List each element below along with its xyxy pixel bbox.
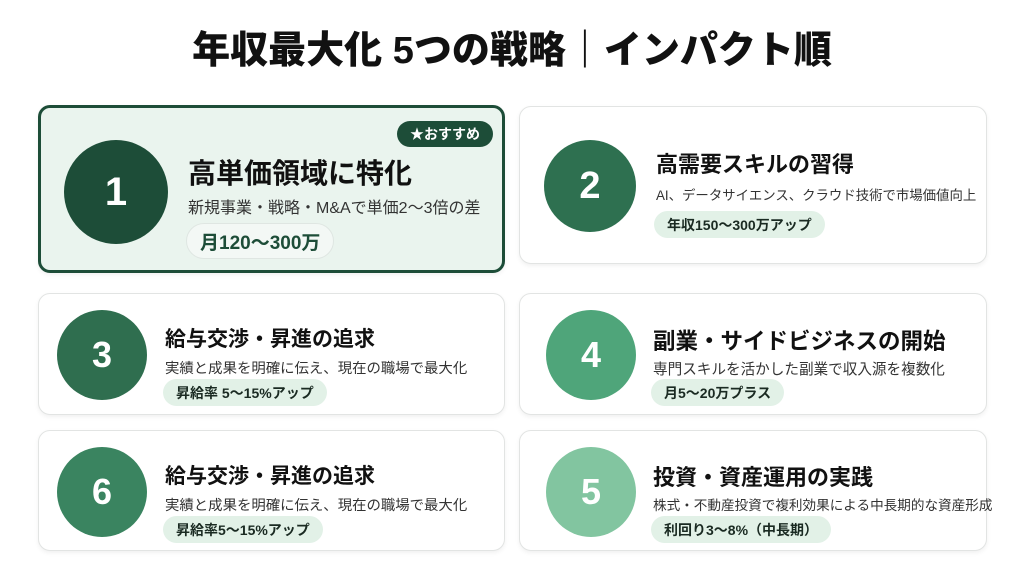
text: 実績と成果を明確に伝え、現在の職場で最大化	[165, 361, 467, 377]
heading: 給与交渉・昇進の追求	[165, 328, 375, 351]
heading: 高需要スキルの習得	[656, 152, 854, 177]
pill	[163, 516, 323, 543]
number circle 6: 6	[92, 471, 112, 512]
number circle 1: 1	[105, 170, 127, 214]
text: AI、データサイエンス、クラウド技術で市場価値向上	[656, 188, 976, 203]
heading: 高単価領域に特化	[188, 158, 412, 189]
heading: 給与交渉・昇進の追求	[165, 465, 375, 488]
number circle 5: 5	[581, 471, 601, 512]
number circle 4: 4	[581, 334, 601, 375]
badge: recommended: ★おすすめ	[410, 126, 480, 142]
badge: recommended	[397, 121, 493, 147]
pill	[186, 223, 334, 259]
heading: 投資・資産運用の実践	[653, 465, 873, 490]
number circle 5	[546, 447, 636, 537]
number circle 1	[64, 140, 168, 244]
text: 株式・不動産投資で複利効果による中長期的な資産形成	[653, 498, 992, 513]
pill: 月5〜20万プラス	[664, 384, 771, 400]
panel: strategy 3	[38, 293, 505, 415]
pill	[654, 211, 825, 238]
pill: 月120〜300万	[200, 232, 320, 254]
pill	[651, 379, 784, 406]
pill: 昇給率5〜15%アップ	[176, 522, 310, 538]
text: 新規事業・戦略・M&Aで単価2〜3倍の差	[188, 200, 480, 217]
panel: strategy 4	[519, 293, 987, 415]
text: 専門スキルを活かした副業で収入源を複数化	[653, 362, 945, 378]
heading: 副業・サイドビジネスの開始	[653, 329, 946, 354]
number circle 4	[546, 310, 636, 400]
number circle 6	[57, 447, 147, 537]
panel: strategy 6	[38, 430, 505, 551]
panel: strategy 1	[38, 105, 505, 273]
pill	[163, 379, 327, 406]
pill: 利回り3〜8%（中長期）	[664, 522, 818, 538]
number circle 3	[57, 310, 147, 400]
number circle 3: 3	[92, 334, 112, 375]
pill	[651, 516, 831, 543]
pill: 昇給率 5〜15%アップ	[176, 384, 314, 400]
panel: strategy 2	[519, 106, 987, 264]
number circle 2	[544, 140, 636, 232]
panel: strategy 5	[519, 430, 987, 551]
title: 年収最大化 5つの戦略｜インパクト順	[192, 30, 832, 72]
pill: 年収150〜300万アップ	[667, 216, 812, 232]
text: 実績と成果を明確に伝え、現在の職場で最大化	[165, 498, 467, 514]
number circle 2: 2	[579, 164, 601, 206]
